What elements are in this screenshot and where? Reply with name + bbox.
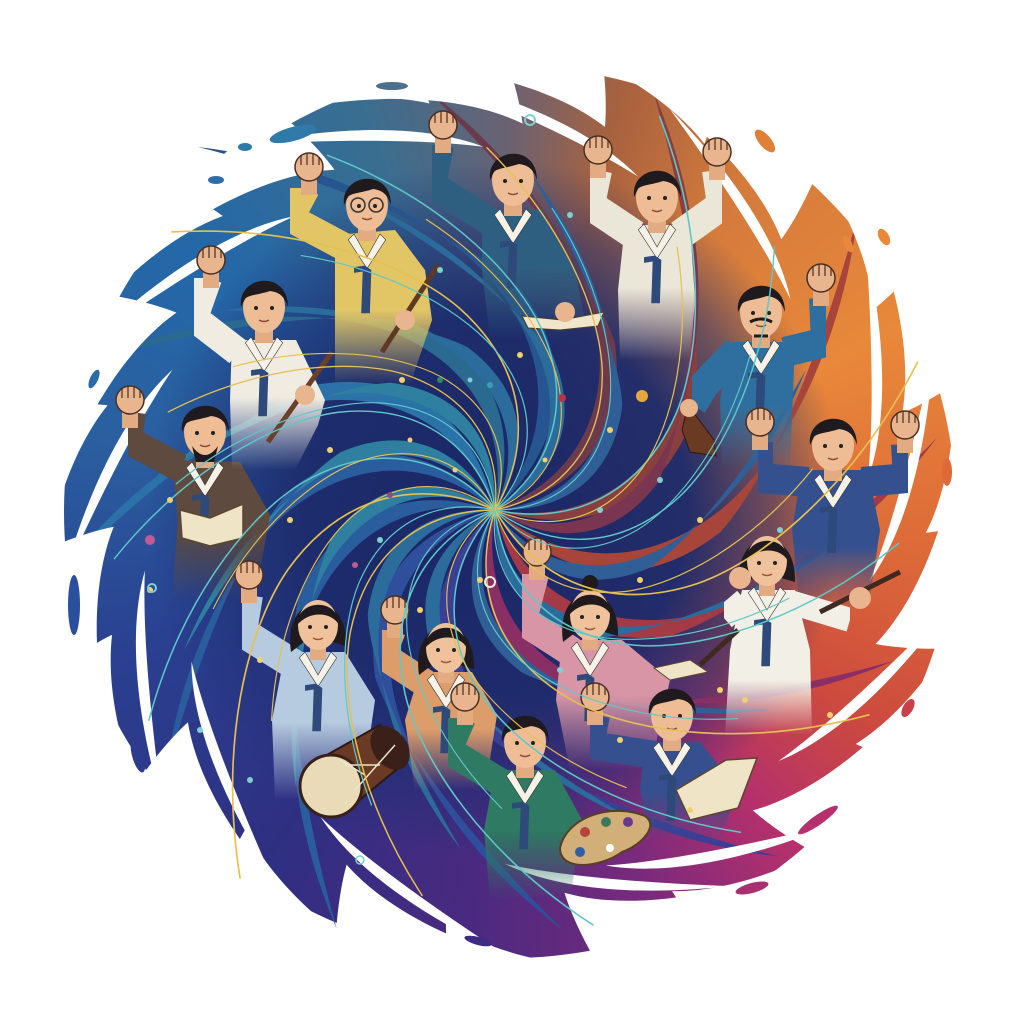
figure: navy robe man, both fists raised xyxy=(746,408,919,610)
figure: green robe man xyxy=(448,683,582,900)
figure: white robe man, both fists raised xyxy=(584,136,731,360)
figure: brown robe man with book xyxy=(116,386,270,600)
figure: white robe man with stick xyxy=(194,246,332,470)
figure: light blue robe woman with drum xyxy=(235,561,375,800)
glowing dots xyxy=(145,115,833,864)
figure: yellow robe man with glasses and brush xyxy=(290,153,438,385)
figure: white robe woman with brush xyxy=(724,536,900,735)
paint droplets around the rim xyxy=(68,82,952,948)
thin white slits in the rim xyxy=(63,77,952,955)
figure: blue robe man with instrument xyxy=(680,264,835,470)
swirl core xyxy=(145,160,845,860)
swirl streaks xyxy=(53,89,937,931)
figure: pink robe woman with book xyxy=(522,538,738,770)
figure: orange robe woman xyxy=(381,596,497,790)
figure: teal robe man with book xyxy=(429,111,604,340)
flowing gold and teal lines xyxy=(114,117,918,925)
illustration xyxy=(64,66,956,958)
swirl colour disc xyxy=(64,66,956,958)
icon: janggu drum xyxy=(300,719,418,817)
icon: paint palette xyxy=(560,811,650,865)
figure: blue robe man with book xyxy=(581,683,757,840)
